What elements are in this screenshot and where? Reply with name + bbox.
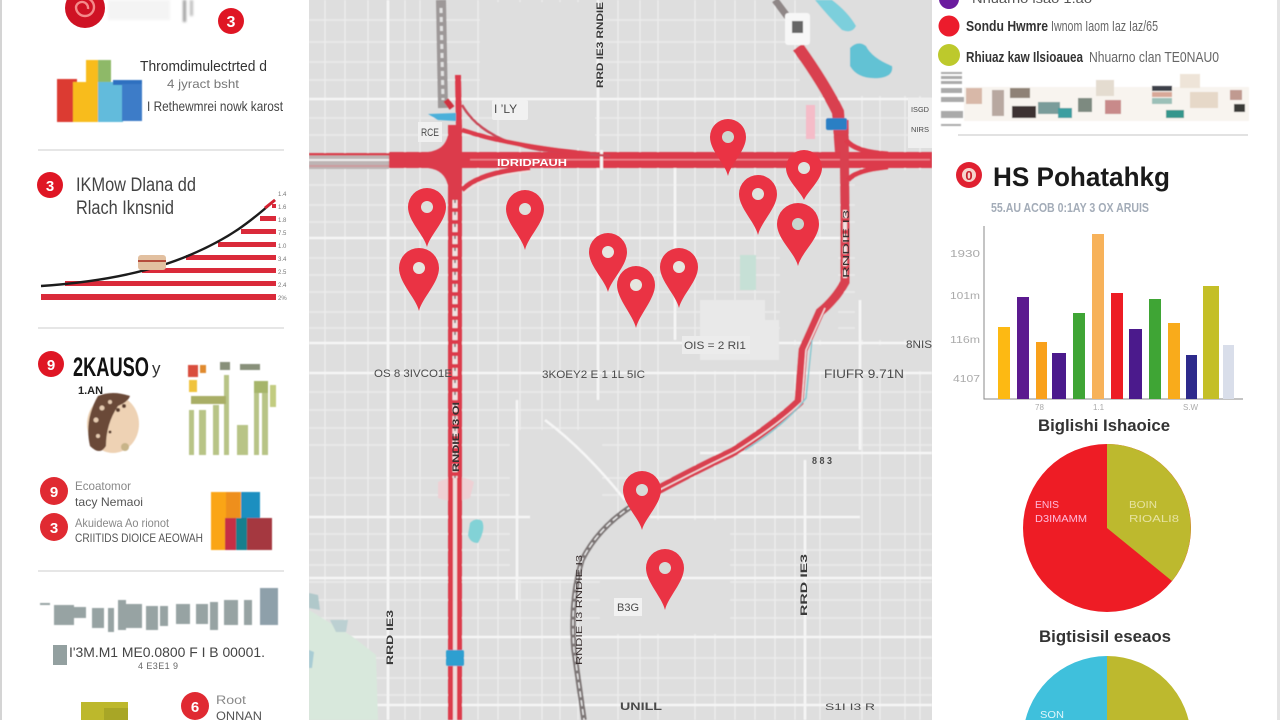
map labels: ISGD <box>911 107 929 114</box>
pin 4 <box>777 203 819 266</box>
map labels: S1I I3 R <box>825 702 876 712</box>
bar chart: 4107 <box>953 374 981 385</box>
stat row 1: 9 <box>50 484 58 501</box>
pie title 1: Biglishi Ishaoice <box>1038 416 1170 435</box>
pie chart 1 <box>1023 444 1191 612</box>
bar chart: 101m <box>950 291 980 302</box>
panel: left column <box>37 0 287 720</box>
panel: map <box>309 0 932 720</box>
map labels: RCE <box>421 127 439 139</box>
map labels: UNILL <box>620 701 662 713</box>
pin 10 <box>399 248 439 311</box>
stat row 1: tacy Nemaoi <box>75 495 143 509</box>
badge 6 <box>181 692 262 720</box>
map labels: 3KOEY2 E 1 1L 5IC <box>542 369 645 381</box>
big number heading: 2KAUSO <box>73 352 149 382</box>
chart subtitle: 55.AU ACOB 0:1AY 3 OX ARUIS <box>991 200 1149 215</box>
bar chart <box>950 226 1243 412</box>
stacked blocks <box>211 492 272 550</box>
map labels: I ’LY <box>494 102 517 116</box>
map labels: RRD IE3 RNDIE <box>595 2 605 88</box>
heading: IKMow Dlana dd <box>76 175 196 196</box>
chart: red bars with curve: 1.8 <box>278 218 287 224</box>
map labels: RNDIE I3 <box>842 209 851 278</box>
bar chart: 78 <box>1035 403 1044 412</box>
text block 1 <box>140 58 283 114</box>
heading <box>76 175 196 219</box>
map labels: OS 8 3IVCO1E <box>374 368 452 380</box>
legend row olive: Rhiuaz kaw Ilsioauea <box>966 49 1084 66</box>
chart: red bars with curve: 1.6 <box>278 205 287 211</box>
heading: Rlach Iknsnid <box>76 198 174 219</box>
map labels: RNDIE I3 RNDIE I3 <box>575 554 584 665</box>
pin 8 <box>617 266 655 328</box>
plain gray blocks without streets <box>480 0 932 634</box>
legend row red: Sondu Hwmre <box>966 18 1048 35</box>
photo collage strip <box>941 72 1249 126</box>
major streets <box>309 0 932 720</box>
map labels: RRD IE3 <box>385 610 395 665</box>
map labels: RNDIE I3 OI <box>451 402 461 472</box>
light blocks <box>700 300 779 360</box>
strip chart <box>40 588 278 632</box>
pin 9 <box>660 248 698 308</box>
map labels: B3G <box>617 602 639 614</box>
pin 1 <box>710 119 746 176</box>
caption <box>53 644 265 671</box>
map labels: IDRIDPAUH <box>497 158 567 169</box>
bar chart: 1930 <box>950 249 981 260</box>
text block 1: I Rethewmrei nowk karost <box>147 98 283 114</box>
legend row purple <box>939 0 1092 9</box>
pin 11 <box>623 471 661 530</box>
freeway: horizontal <box>309 153 389 169</box>
minor streets <box>309 0 932 720</box>
pin 5 <box>408 188 446 247</box>
section: feature <box>38 351 276 550</box>
pie chart 1: BOIN <box>1129 500 1157 511</box>
small column chart <box>188 362 276 455</box>
chart: red bars with curve: 1.4 <box>278 192 287 198</box>
chart: red bars with curve: 2% <box>278 296 287 302</box>
caption: 4 E3E1 9 <box>138 661 178 671</box>
pin 12 <box>646 549 684 610</box>
stat row 2: Akuidewa Ao rionot <box>75 516 170 530</box>
map pins <box>399 119 822 610</box>
pie chart 1: ENIS <box>1035 500 1059 511</box>
chart: red bars with curve: 3.4 <box>278 257 287 263</box>
section: growth curve <box>37 172 287 302</box>
map labels: 8NIS <box>906 339 932 351</box>
bar chart: 1.1 <box>1093 403 1105 412</box>
badge 3 <box>38 351 64 377</box>
map labels: OIS = 2 RI1 <box>684 340 746 352</box>
icon: yellow cube <box>81 702 128 720</box>
pin 6 <box>506 190 544 250</box>
bar chart: 116m <box>950 335 980 346</box>
legend row olive <box>938 44 1219 66</box>
park <box>309 610 378 720</box>
map labels: 8 8 3 <box>812 456 832 467</box>
icon: red spiral <box>65 0 105 28</box>
chart: red bars with curve: 2.5 <box>278 270 287 276</box>
big number heading <box>73 352 161 397</box>
pin 7 <box>589 233 627 292</box>
chart: red bars with curve: 1.0 <box>278 244 287 250</box>
caption: I'3M.M1 ME0.0800 F I B 00001. <box>69 644 265 660</box>
badge 6: Root <box>216 693 247 707</box>
text block 1: 4 jyract bsht <box>167 77 240 91</box>
legend row red <box>938 16 1158 36</box>
map labels: NIRS <box>911 127 929 134</box>
pie chart 1: RIOALI8 <box>1129 514 1180 525</box>
pie title 2: Bigtisisil eseaos <box>1039 627 1171 646</box>
stat row 2: CRIITIDS DIOICE AEOWAH <box>75 531 203 545</box>
badge 1: 3 <box>227 14 236 31</box>
pin 2 <box>786 150 822 200</box>
stat row 1 <box>40 477 143 509</box>
freeway: curve <box>775 0 790 20</box>
heading badge <box>956 162 982 188</box>
pin 3 <box>739 175 777 235</box>
map labels: FIUFR 9.71N <box>824 367 904 381</box>
pie chart 2 <box>1023 656 1191 720</box>
water <box>850 43 892 78</box>
badge 6: 6 <box>191 699 199 716</box>
stat row 2 <box>40 513 203 545</box>
pie chart 1: D3IMAMM <box>1035 514 1087 525</box>
section heading: HS Pohatahkg <box>993 162 1170 192</box>
faded strip <box>108 0 193 22</box>
big number heading: 1.AN <box>78 385 103 397</box>
badge 2: 3 <box>46 178 54 195</box>
chart: red bars with curve: 2.4 <box>278 283 287 289</box>
stat row 1: Ecoatomor <box>75 479 131 493</box>
interchange ramps <box>462 105 610 156</box>
icon: coloured block chart <box>57 60 142 122</box>
heading badge: 0 <box>965 168 973 183</box>
big number heading: y <box>152 359 161 378</box>
panel: right column <box>938 0 1249 720</box>
chart: red bars with curve: 7.5 <box>278 231 287 237</box>
road shields <box>428 113 456 121</box>
map labels <box>374 2 932 713</box>
legend row red: Iwnom Iaom Iaz Iaz/65 <box>1051 18 1158 35</box>
legend <box>938 0 1219 66</box>
bar chart: S.W <box>1183 403 1199 412</box>
freeway: vertical <box>441 0 443 108</box>
badge 3: 9 <box>47 357 55 374</box>
badge 2 <box>37 172 63 198</box>
chart: red bars with curve <box>41 192 287 302</box>
badge 1 <box>218 8 244 34</box>
legend row olive: Nhuarno clan TE0NAU0 <box>1089 49 1219 66</box>
map labels: RRD IE3 <box>799 554 809 616</box>
illustration: brown texture <box>87 393 139 453</box>
text block 1: Thromdimulectrted d <box>140 58 267 75</box>
stat row 2: 3 <box>50 520 58 537</box>
